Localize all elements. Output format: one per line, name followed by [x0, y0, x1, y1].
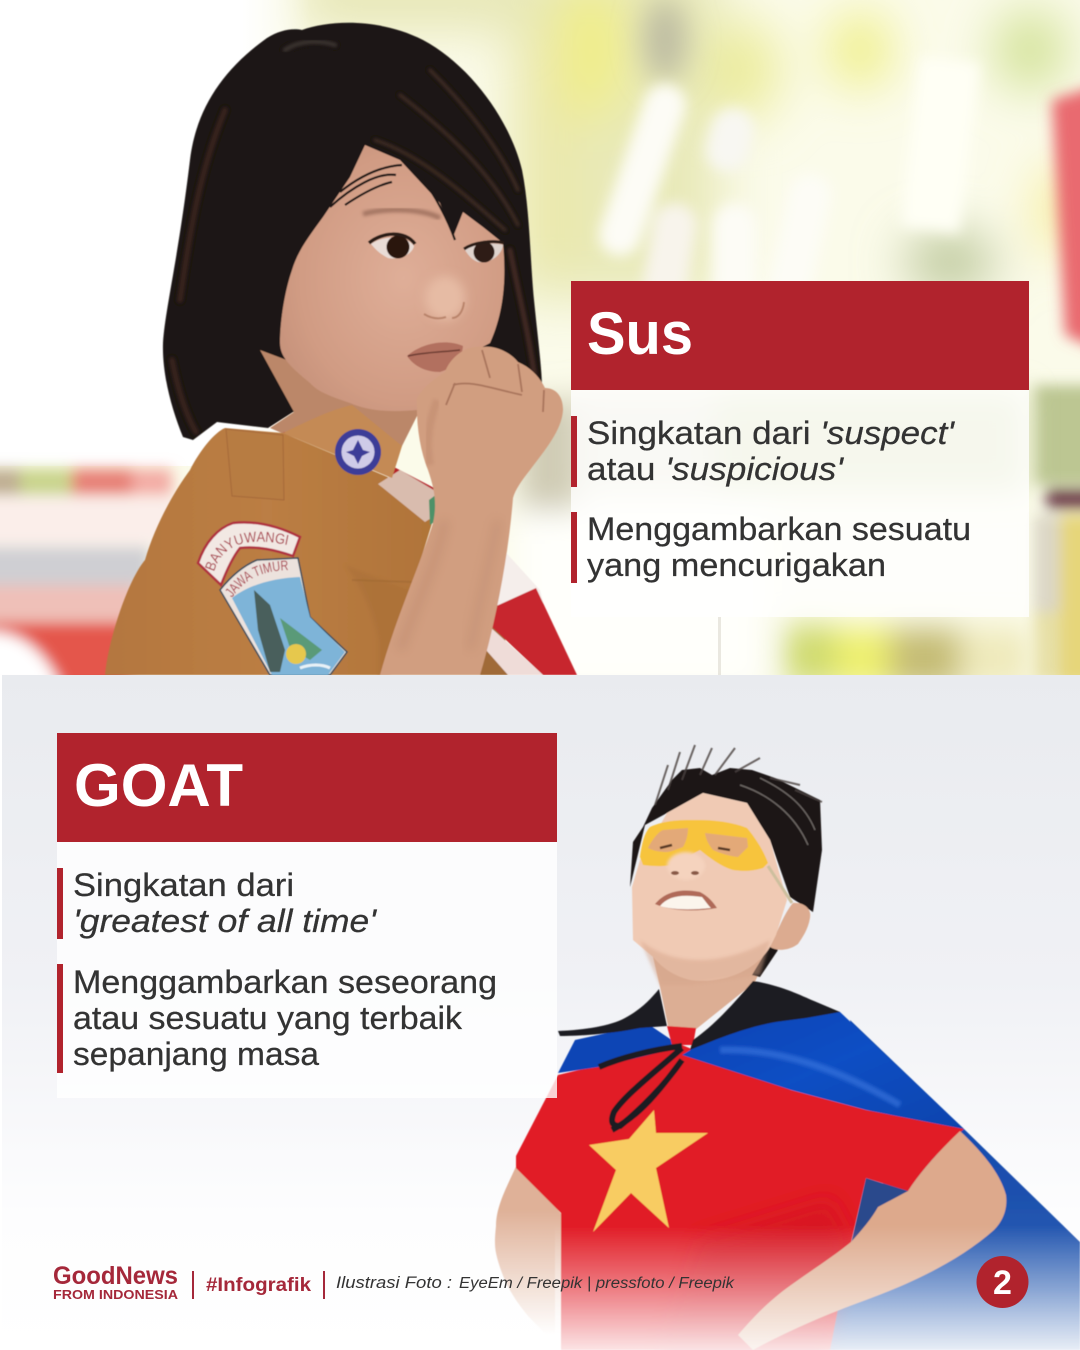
- shirt shadow right of arm: [480, 580, 513, 675]
- footer: [53, 1256, 1028, 1308]
- panel: GOAT definition: [57, 733, 557, 1098]
- shoulder strap: [226, 429, 284, 500]
- illustration: superhero boy: [495, 745, 1080, 1350]
- fringe fine strands: [330, 165, 455, 240]
- lips: [407, 342, 463, 372]
- text block: Sus meaning: Menggambarkan sesuatu: [587, 511, 971, 547]
- text block: Sus abbreviation: atau 'suspicious': [587, 451, 845, 487]
- text block: GOAT meaning: atau sesuatu yang terbaik: [73, 1000, 463, 1036]
- text block: GOAT meaning: sepanjang masa: [73, 1036, 319, 1072]
- heading box: GOAT: GOAT: [74, 752, 243, 819]
- text block: Sus meaning: [571, 511, 971, 583]
- nose: [667, 852, 705, 880]
- text block: Sus abbreviation: [571, 415, 956, 487]
- nose highlight: [425, 276, 465, 320]
- shoulder patch: Jawa Timur: JAWA TIMUR: [225, 560, 288, 598]
- logo: GoodNews from Indonesia: FROM INDONESIA: [53, 1287, 179, 1302]
- mask: [640, 820, 792, 903]
- hair spikes: [630, 745, 822, 977]
- section background: GOAT: [0, 675, 1080, 1350]
- scarf red and white tail: [486, 546, 577, 675]
- shoulder patch: Jawa Timur: [218, 556, 348, 675]
- fist and forearm: [380, 347, 563, 675]
- cape fold shadow: [851, 1178, 910, 1244]
- photo: blurred park background: [0, 0, 1080, 692]
- photo credit: Ilustrasi Foto :: [336, 1274, 452, 1292]
- face: [632, 793, 787, 981]
- photo credit: EyeEm / Freepik | pressfoto / Freepik: [459, 1275, 735, 1292]
- text block: Sus meaning: yang mencurigakan: [587, 547, 886, 583]
- face: [280, 145, 504, 411]
- neck: [260, 350, 420, 470]
- text block: GOAT meaning: Menggambarkan seseorang: [73, 964, 497, 1000]
- shirt: [105, 428, 433, 675]
- ear: [770, 903, 810, 950]
- cape back: [825, 1020, 1080, 1350]
- right arm: [738, 1131, 1006, 1350]
- logo: GoodNews from Indonesia: GoodNews: [53, 1262, 178, 1290]
- bottom fade: [555, 1225, 1080, 1350]
- cape front right: [682, 1005, 964, 1129]
- right edge blur column: [1034, 85, 1080, 685]
- heading box: Sus: Sus: [587, 300, 693, 367]
- neck: [653, 947, 770, 1030]
- page number badge: [976, 1256, 1028, 1308]
- text block: GOAT abbreviation: Singkatan dari: [73, 867, 294, 903]
- shoulder patch: Banyuwangi: BANYUWANGI: [204, 531, 289, 572]
- text block: GOAT abbreviation: [57, 867, 378, 939]
- shoulder patch: Banyuwangi: [196, 520, 302, 588]
- left arm: [495, 1162, 575, 1350]
- illustration: scout girl: [104, 22, 578, 675]
- scarf at neck: [283, 432, 438, 525]
- text block: Sus abbreviation: Singkatan dari 'suspect': [587, 415, 956, 451]
- page number badge: 2: [993, 1264, 1012, 1302]
- hair shine strands: [172, 42, 535, 432]
- text block: GOAT meaning: [57, 964, 497, 1073]
- collar with scout badge: [283, 405, 402, 478]
- cape front left: [558, 1024, 682, 1073]
- right eye: [464, 242, 504, 262]
- heading box: Sus: [571, 281, 1029, 390]
- heading box: GOAT: [57, 733, 557, 842]
- eyebrow: [363, 210, 440, 218]
- shirt: [516, 1045, 964, 1350]
- left eye: [369, 234, 415, 258]
- panel: Sus definition: [571, 281, 1029, 617]
- star: [589, 1110, 708, 1232]
- smile: [655, 890, 717, 910]
- logo: GoodNews from Indonesia: [53, 1262, 179, 1302]
- photo credit: [336, 1274, 735, 1292]
- distant red and green bands: [0, 469, 180, 692]
- hashtag: #Infografik: [206, 1275, 311, 1296]
- black collar and ties: [558, 981, 840, 1130]
- text block: GOAT abbreviation: 'greatest of all time': [73, 903, 378, 939]
- hair silhouette: [163, 23, 542, 440]
